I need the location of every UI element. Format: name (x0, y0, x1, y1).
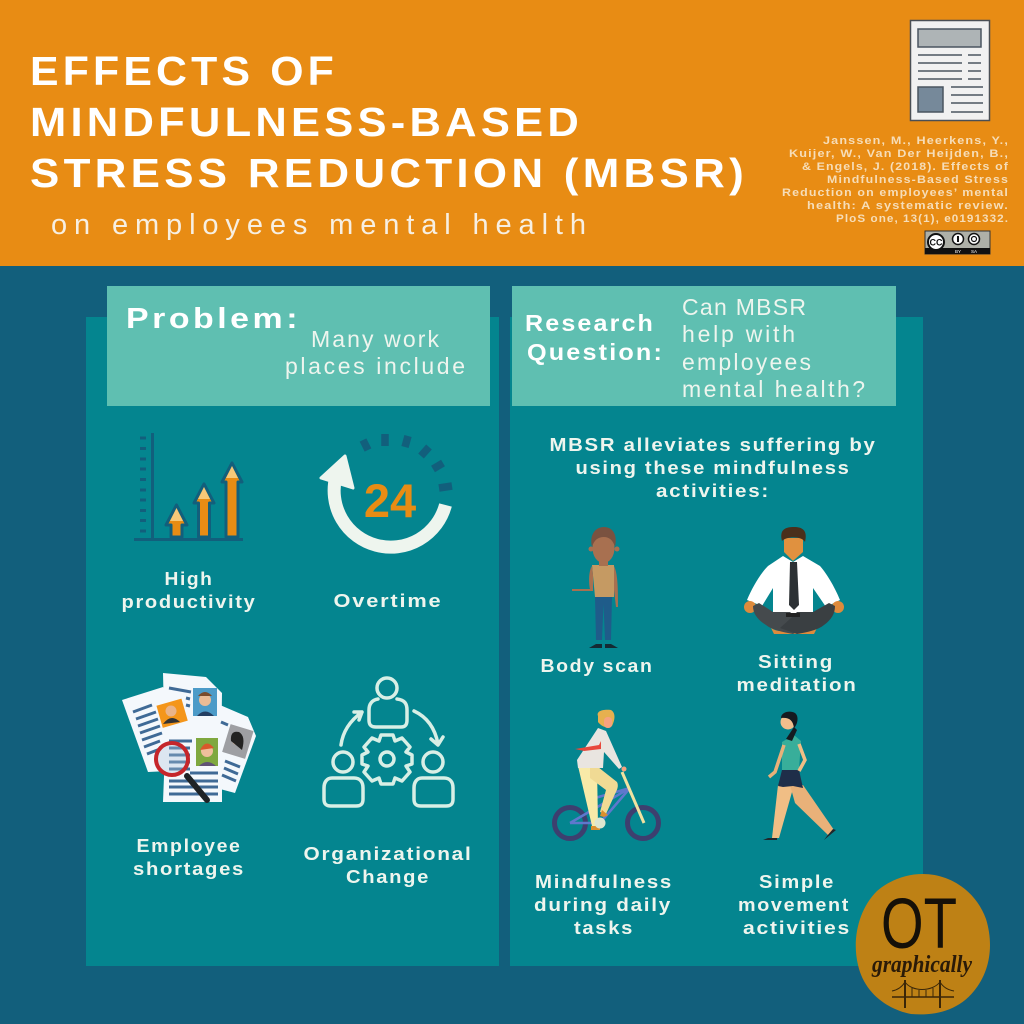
citation: Janssen, M., Heerkens, Y., (823, 135, 1009, 147)
icon: creative commons licence badge: SA (971, 249, 977, 254)
icon: research paper (910, 20, 990, 120)
label: high productivity (122, 569, 256, 612)
problem heading box: Many work (311, 326, 440, 352)
intro text: mindfulness activities: MBSR alleviates suffering by (550, 435, 876, 455)
label: mindfulness during daily tasks (534, 872, 673, 938)
research question heading box: help with (682, 321, 796, 347)
label: employee shortages: Employee (136, 836, 242, 856)
problem heading box: places include (285, 353, 466, 379)
label: mindfulness during daily tasks: during daily (534, 895, 672, 915)
label: sitting meditation: meditation (736, 675, 858, 695)
research question heading box: Research (525, 310, 655, 336)
citation: health: A systematic review. (807, 200, 1009, 212)
label: simple movement activities (738, 872, 851, 938)
problem heading box: Problem: (126, 303, 301, 335)
label: body scan: Body scan (540, 656, 654, 676)
icon: person cycling (554, 710, 658, 838)
panel: problem (86, 317, 499, 966)
citation: Reduction on employees’ mental (782, 187, 1009, 199)
label: overtime: Overtime (334, 591, 442, 611)
citation (782, 135, 1009, 225)
subtitle: on employees mental health (51, 209, 586, 241)
label: organizational change (304, 844, 472, 887)
icon: creative commons licence badge: BY (955, 249, 961, 254)
title: STRESS REDUCTION (MBSR) (30, 150, 748, 196)
label: high productivity: High (164, 569, 214, 589)
icon: creative commons licence badge: CC (930, 238, 943, 248)
research question heading box: employees (682, 349, 812, 375)
icon: employee resumes under magnifying glass (122, 673, 256, 802)
label: sitting meditation (736, 652, 858, 695)
research question heading box: mental health? (682, 376, 866, 402)
title: EFFECTS OF (30, 48, 338, 94)
label: high productivity: productivity (122, 592, 256, 612)
intro text: mindfulness activities (550, 435, 876, 501)
citation: PloS one, 13(1), e0191332. (836, 213, 1009, 225)
icon: standing figure, body scan (572, 527, 620, 648)
panel: research question (510, 317, 923, 966)
icon: organizational change (324, 678, 453, 806)
citation: Kuijer, W., Van Der Heijden, B., (789, 148, 1009, 160)
label: mindfulness during daily tasks: tasks (574, 918, 634, 938)
label: simple movement activities: movement (738, 895, 850, 915)
label: mindfulness during daily tasks: Mindfulness (535, 872, 673, 892)
problem heading box (107, 286, 490, 406)
icon: sitting meditation figure (744, 527, 844, 634)
icon: overtime 24 clock: 24 (364, 474, 416, 527)
icon: creative commons licence badge (925, 231, 990, 254)
intro text: mindfulness activities: using these mindfulness (576, 458, 850, 478)
citation: Mindfulness-Based Stress (827, 174, 1009, 186)
icon: woman walking (763, 712, 836, 840)
logo: OT graphically: graphically (871, 952, 972, 978)
label: simple movement activities: Simple (759, 872, 835, 892)
research question heading box: Question: (527, 339, 664, 365)
icon: productivity chart (134, 433, 243, 540)
logo: OT graphically (856, 874, 990, 1014)
header banner (0, 0, 1024, 266)
research question heading box (512, 286, 896, 406)
label: employee shortages: shortages (133, 859, 245, 879)
label: organizational change: Organizational (304, 844, 472, 864)
citation: & Engels, J. (2018). Effects of (802, 161, 1009, 173)
research question heading box: Can MBSR (682, 294, 807, 320)
label: organizational change: Change (346, 867, 430, 887)
label: employee shortages (133, 836, 245, 879)
label: simple movement activities: activities (743, 918, 851, 938)
intro text: mindfulness activities: activities: (656, 481, 770, 501)
icon: overtime 24 clock (321, 434, 452, 547)
title: MINDFULNESS-BASED (30, 99, 583, 145)
logo: OT graphically: OT (881, 885, 957, 964)
label: sitting meditation: Sitting (758, 652, 834, 672)
title (30, 48, 748, 196)
